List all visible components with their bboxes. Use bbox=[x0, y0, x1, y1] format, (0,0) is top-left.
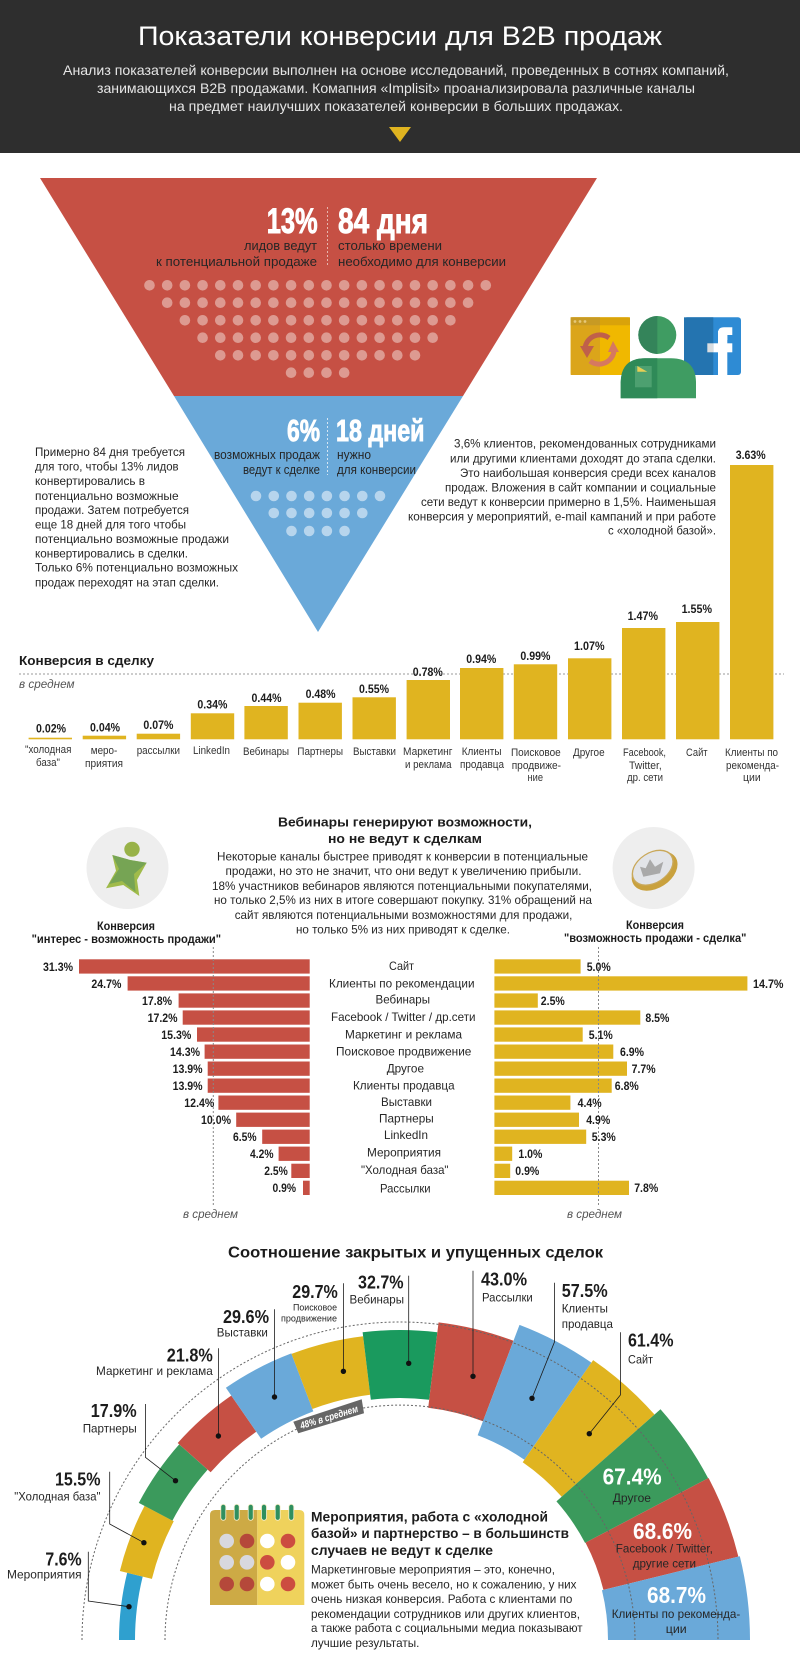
bar values: 1.47% bbox=[628, 609, 658, 623]
text block: funnel explanation: потенциально возможные продажи bbox=[35, 532, 229, 546]
arc labels: Поисковое bbox=[293, 1302, 337, 1314]
blue stage stats: ведут к сделке bbox=[243, 463, 320, 477]
arc labels: другие сети bbox=[633, 1556, 696, 1570]
icon: person bbox=[621, 316, 696, 398]
bar chart: conversion to deal bbox=[19, 448, 784, 784]
arc labels: Рассылки bbox=[482, 1290, 533, 1304]
channel labels: Мероприятия bbox=[367, 1146, 441, 1160]
bar chart: opportunity to deal: 6.9% bbox=[620, 1045, 644, 1059]
bar category labels bbox=[25, 744, 779, 784]
header band bbox=[0, 0, 800, 153]
channel labels: Партнеры bbox=[379, 1112, 434, 1126]
bar chart: lead to opportunity: 13.9% bbox=[173, 1062, 203, 1076]
bar chart: lead to opportunity: 17.8% bbox=[142, 994, 172, 1008]
bar category labels: "холодная bbox=[25, 744, 71, 756]
bar chart: lead to opportunity: 2.5% bbox=[264, 1164, 288, 1178]
heading: webinars: Вебинары генерируют возможности, bbox=[278, 814, 532, 830]
channel labels: Сайт bbox=[389, 959, 414, 973]
bar values: 0.55% bbox=[359, 682, 389, 696]
bar chart: lead to opportunity: 4.2% bbox=[250, 1147, 274, 1161]
icon: facebook bbox=[684, 317, 741, 375]
average label: в среднем bbox=[19, 679, 75, 691]
text block: funnel explanation: продаж переходят на этап сделки. bbox=[35, 576, 219, 590]
text block: referral conversion bbox=[408, 436, 716, 538]
header intro text: Анализ показателей конверсии выполнен на основе исследований, проведенных в сотнях компаний, bbox=[63, 62, 729, 78]
arc labels: Выставки bbox=[217, 1326, 268, 1340]
bar category labels: Клиенты по bbox=[725, 747, 778, 759]
blue stage stats: возможных продаж bbox=[214, 448, 321, 462]
bar category labels: продавца bbox=[460, 759, 505, 771]
header intro text: занимающихся B2B продажами. Комапния «Implisit» проанализировала различные каналы bbox=[97, 80, 695, 96]
callout text: очень низкая конверсия. Работа с клиентами по bbox=[311, 1592, 573, 1606]
bar chart: opportunity to deal bbox=[494, 947, 784, 1221]
bar chart: opportunity to deal: 6.8% bbox=[615, 1079, 639, 1093]
icon: website bbox=[571, 317, 630, 375]
callout text bbox=[311, 1562, 583, 1650]
red stage dots bbox=[144, 280, 491, 378]
blue stage stats: для конверсии bbox=[337, 463, 416, 477]
bar category labels: LinkedIn bbox=[193, 745, 230, 757]
text block: funnel explanation bbox=[35, 445, 238, 590]
bar category labels: Сайт bbox=[686, 747, 708, 759]
blue stage dots bbox=[251, 491, 385, 536]
text block: funnel explanation: конвертировались в сделки. bbox=[35, 546, 188, 560]
icon: coin bbox=[613, 827, 695, 909]
channel labels: Facebook / Twitter / др.сети bbox=[331, 1010, 476, 1024]
callout heading: Мероприятия, работа с «холодной bbox=[311, 1508, 548, 1524]
title: Показатели конверсии для B2B продаж bbox=[138, 21, 662, 51]
bar chart: lead to opportunity: 15.3% bbox=[161, 1028, 192, 1042]
text block: webinars explanation: сайт являются потенциальными возможностями для продажи, bbox=[235, 908, 572, 922]
text block: funnel explanation: Примерно 84 дня требуется bbox=[35, 445, 185, 459]
bar category labels: Выставки bbox=[353, 746, 396, 758]
arc labels: "Холодная база" bbox=[14, 1490, 100, 1504]
bar chart: lead to opportunity: 12.4% bbox=[184, 1096, 215, 1110]
text block: funnel explanation: для того, чтобы 13% лидов bbox=[35, 460, 179, 474]
chart heading: Конверсия в сделку bbox=[19, 653, 155, 668]
average label: в среднем bbox=[567, 1209, 622, 1221]
bar chart: lead to opportunity: 24.7% bbox=[91, 977, 122, 991]
bar values: 0.94% bbox=[466, 652, 497, 666]
bar category labels: Партнеры bbox=[297, 746, 343, 758]
bar chart: lead to opportunity: 14.3% bbox=[170, 1045, 200, 1059]
bar category labels: Клиенты bbox=[462, 746, 502, 758]
bar chart: opportunity to deal: 2.5% bbox=[541, 994, 565, 1008]
channel labels: "Холодная база" bbox=[361, 1163, 448, 1177]
text block: webinars explanation bbox=[212, 850, 592, 936]
arc labels bbox=[7, 1270, 740, 1636]
label: lead to opportunity bbox=[32, 921, 221, 946]
arc labels: Партнеры bbox=[83, 1422, 137, 1436]
icon: star figure bbox=[86, 827, 168, 909]
text block: referral conversion: Это наибольшая конверсия среди всех каналов bbox=[460, 466, 716, 480]
bar chart: lead to opportunity: 17.2% bbox=[148, 1011, 178, 1025]
arc labels: 7.6% bbox=[45, 1550, 82, 1570]
channel labels: Клиенты по рекомендации bbox=[329, 976, 474, 990]
bar category labels: рекоменда- bbox=[726, 760, 779, 772]
text block: webinars explanation: но только 2,5% из них в итоге совершают покупку. 31% обращений на bbox=[214, 893, 592, 907]
red stage stats: столько времени bbox=[338, 239, 442, 253]
channel labels: Выставки bbox=[381, 1095, 432, 1109]
blue stage stats: 18 дней bbox=[336, 413, 424, 448]
bar category labels: Facebook, bbox=[623, 747, 666, 759]
bar chart: opportunity to deal: 4.9% bbox=[586, 1113, 610, 1127]
callout heading bbox=[311, 1508, 569, 1558]
average badge: 48% в среднем bbox=[298, 1404, 360, 1432]
bar values bbox=[36, 448, 766, 736]
arc chart bbox=[7, 1270, 740, 1640]
bar category labels: Поисковое bbox=[511, 747, 561, 759]
bar category labels: др. сети bbox=[627, 772, 663, 784]
header intro text bbox=[63, 62, 729, 114]
bar chart: opportunity to deal: 8.5% bbox=[645, 1011, 670, 1025]
red stage stats: 84 дня bbox=[338, 202, 428, 241]
text block: webinars explanation: продажи, но это не значит, что они ведут к увеличению прибыли. bbox=[226, 864, 582, 878]
arc labels: Другое bbox=[613, 1491, 651, 1505]
text block: webinars explanation: Некоторые каналы быстрее приводят к конверсии в потенциальные bbox=[217, 850, 588, 864]
bar category labels: ции bbox=[743, 772, 761, 784]
callout text: Маркетинговые мероприятия – это, конечно, bbox=[311, 1562, 555, 1576]
arc labels: 15.5% bbox=[55, 1470, 100, 1490]
bar chart: lead to opportunity bbox=[43, 947, 310, 1221]
bar chart: opportunity to deal: 14.7% bbox=[753, 977, 784, 991]
bar chart: opportunity to deal: 7.8% bbox=[634, 1181, 658, 1195]
channel labels: Другое bbox=[387, 1062, 424, 1076]
channel labels: Клиенты продавца bbox=[353, 1078, 455, 1092]
bar chart: opportunity to deal: 5.3% bbox=[592, 1130, 616, 1144]
text block: referral conversion: сети ведут к конверсии примерно в 1,5%. Наименьшая bbox=[421, 495, 716, 509]
text block: funnel explanation: Только 6% потенциально возможных bbox=[35, 560, 238, 574]
heading: webinars bbox=[278, 814, 532, 846]
arc labels: 68.7% bbox=[647, 1582, 706, 1608]
arc labels: Вебинары bbox=[350, 1292, 404, 1306]
arc labels: Мероприятия bbox=[7, 1568, 82, 1582]
callout text: а также работа с социальными медиа показывают bbox=[311, 1621, 583, 1635]
label: opportunity to deal bbox=[564, 920, 746, 945]
label: lead to opportunity: "интерес - возможность продажи" bbox=[32, 934, 221, 946]
funnel: blue stage bbox=[174, 396, 463, 632]
text block: referral conversion: 3,6% клиентов, рекомендованных сотрудниками bbox=[454, 436, 716, 450]
average label: в среднем bbox=[183, 1209, 238, 1221]
arc labels: 57.5% bbox=[562, 1281, 608, 1301]
arc labels: Клиенты по рекоменда- bbox=[612, 1607, 740, 1621]
arc labels: 43.0% bbox=[481, 1270, 527, 1290]
bar values: 0.78% bbox=[413, 665, 443, 679]
text block: webinars explanation: но только 5% из них приводят к сделке. bbox=[296, 922, 510, 936]
text block: funnel explanation: еще 18 дней для того чтобы bbox=[35, 518, 186, 532]
funnel: red stage bbox=[40, 178, 597, 396]
arc labels: 68.6% bbox=[633, 1518, 692, 1544]
bar chart: lead to opportunity: 10.0% bbox=[201, 1113, 231, 1127]
arc labels: 32.7% bbox=[358, 1272, 404, 1292]
bar chart: lead to opportunity: 0.9% bbox=[272, 1181, 296, 1195]
bar chart: lead to opportunity: 13.9% bbox=[173, 1079, 203, 1093]
arc labels: 17.9% bbox=[91, 1401, 137, 1421]
arc labels: 21.8% bbox=[167, 1346, 213, 1366]
bar values: 0.44% bbox=[252, 691, 282, 705]
text block: funnel explanation: потенциально возможные bbox=[35, 489, 179, 503]
bar category labels: Twitter, bbox=[629, 760, 662, 772]
arc labels: Сайт bbox=[628, 1352, 653, 1366]
bar category labels: Маркетинг bbox=[403, 746, 452, 758]
bar category labels: Другое bbox=[573, 747, 605, 759]
bar values: 1.55% bbox=[682, 602, 712, 616]
header intro text: на предмет наилучших показателей конверсии в больших продажах. bbox=[169, 98, 623, 114]
arc labels: ции bbox=[666, 1622, 687, 1636]
bar chart: opportunity to deal: 5.1% bbox=[589, 1028, 613, 1042]
bar values: 0.99% bbox=[520, 649, 551, 663]
text block: referral conversion: конверсия у мероприятий, e-mail кампаний и при работе bbox=[408, 510, 716, 524]
arc segments bbox=[127, 1364, 679, 1640]
label: lead to opportunity: Конверсия bbox=[97, 921, 155, 933]
text block: referral conversion: с «холодной базой». bbox=[608, 524, 716, 538]
bar chart: opportunity to deal: 0.9% bbox=[515, 1164, 540, 1178]
channel labels bbox=[329, 959, 476, 1196]
bar values: 3.63% bbox=[736, 448, 766, 462]
arc labels: Facebook / Twitter, bbox=[616, 1542, 713, 1556]
bar values: 0.04% bbox=[90, 720, 120, 734]
bar values: 0.02% bbox=[36, 722, 66, 736]
bar chart: opportunity to deal: 4.4% bbox=[578, 1096, 602, 1110]
leader lines bbox=[88, 1271, 620, 1607]
red stage stats bbox=[156, 202, 506, 269]
arc labels: 29.7% bbox=[292, 1282, 338, 1302]
bar chart: opportunity to deal: 1.0% bbox=[518, 1147, 543, 1161]
bar category labels: продвиже- bbox=[512, 760, 561, 772]
bars bbox=[29, 465, 773, 739]
icon: calendar bbox=[210, 1504, 304, 1605]
text block: referral conversion: или другими клиентами доходят до этапа сделки. bbox=[450, 452, 716, 466]
channel labels: Поисковое продвижение bbox=[336, 1044, 472, 1058]
channel labels: LinkedIn bbox=[384, 1128, 428, 1142]
bar category labels: и реклама bbox=[405, 759, 452, 771]
text block: referral conversion: продаж. Вложения в сайт компании и социальные bbox=[445, 480, 716, 494]
arc labels: Маркетинг и реклама bbox=[96, 1364, 213, 1378]
callout text: рекомендации сотрудников или других клиентов, bbox=[311, 1607, 580, 1621]
leader dots bbox=[126, 1361, 592, 1609]
bar category labels: меро- bbox=[91, 745, 118, 757]
arc labels: продавца bbox=[562, 1317, 613, 1331]
red stage stats: необходимо для конверсии bbox=[338, 255, 506, 269]
callout text: лучшие результаты. bbox=[311, 1636, 419, 1650]
bar chart: lead to opportunity: 31.3% bbox=[43, 960, 73, 974]
red stage stats: к потенциальной продаже bbox=[156, 255, 317, 269]
label: opportunity to deal: Конверсия bbox=[626, 920, 684, 932]
heading: won and lost deals: Соотношение закрытых и упущенных сделок bbox=[228, 1244, 604, 1262]
red stage stats: лидов ведут bbox=[244, 239, 317, 253]
bar category labels: Вебинары bbox=[243, 746, 289, 758]
blue stage stats: нужно bbox=[337, 448, 371, 462]
bar values: 0.07% bbox=[143, 718, 174, 732]
bar chart: lead to opportunity: 6.5% bbox=[233, 1130, 257, 1144]
arc labels: 67.4% bbox=[603, 1464, 662, 1490]
heading: webinars: но не ведут к сделкам bbox=[328, 831, 482, 846]
arc labels: 29.6% bbox=[223, 1307, 269, 1327]
text block: webinars explanation: 18% участников вебинаров являются потенциальными покупателями, bbox=[212, 879, 592, 893]
text block: funnel explanation: продажи. Затем потребуется bbox=[35, 503, 189, 517]
bar chart: opportunity to deal: 5.0% bbox=[587, 960, 611, 974]
bar category labels: ние bbox=[528, 772, 543, 784]
bar category labels: приятия bbox=[85, 758, 123, 770]
callout heading: базой» и партнерство – в большинств bbox=[311, 1525, 569, 1541]
blue stage stats: 6% bbox=[287, 413, 320, 448]
callout heading: случаев не ведут к сделке bbox=[311, 1542, 493, 1558]
red stage stats: 13% bbox=[267, 202, 318, 241]
channel labels: Вебинары bbox=[376, 992, 430, 1006]
channel labels: Маркетинг и реклама bbox=[345, 1028, 462, 1042]
callout text: может быть очень весело, но к сожалению, у них bbox=[311, 1578, 576, 1592]
icon: down arrow bbox=[389, 127, 411, 142]
arc labels: Клиенты bbox=[562, 1302, 608, 1316]
label: opportunity to deal: "возможность продажи - сделка" bbox=[564, 933, 746, 945]
text block: funnel explanation: конвертировались в bbox=[35, 474, 145, 488]
bar values: 1.07% bbox=[574, 639, 605, 653]
funnel bbox=[40, 178, 597, 632]
arc labels: 61.4% bbox=[628, 1330, 674, 1350]
blue stage stats bbox=[214, 413, 424, 477]
arc labels: продвижение bbox=[281, 1314, 337, 1324]
bar values: 0.48% bbox=[306, 687, 336, 701]
bar values: 0.34% bbox=[197, 698, 228, 712]
bar category labels: рассылки bbox=[137, 745, 180, 757]
bar category labels: база" bbox=[36, 757, 60, 769]
bar chart: opportunity to deal: 7.7% bbox=[632, 1062, 656, 1076]
channel labels: Рассылки bbox=[380, 1182, 431, 1196]
